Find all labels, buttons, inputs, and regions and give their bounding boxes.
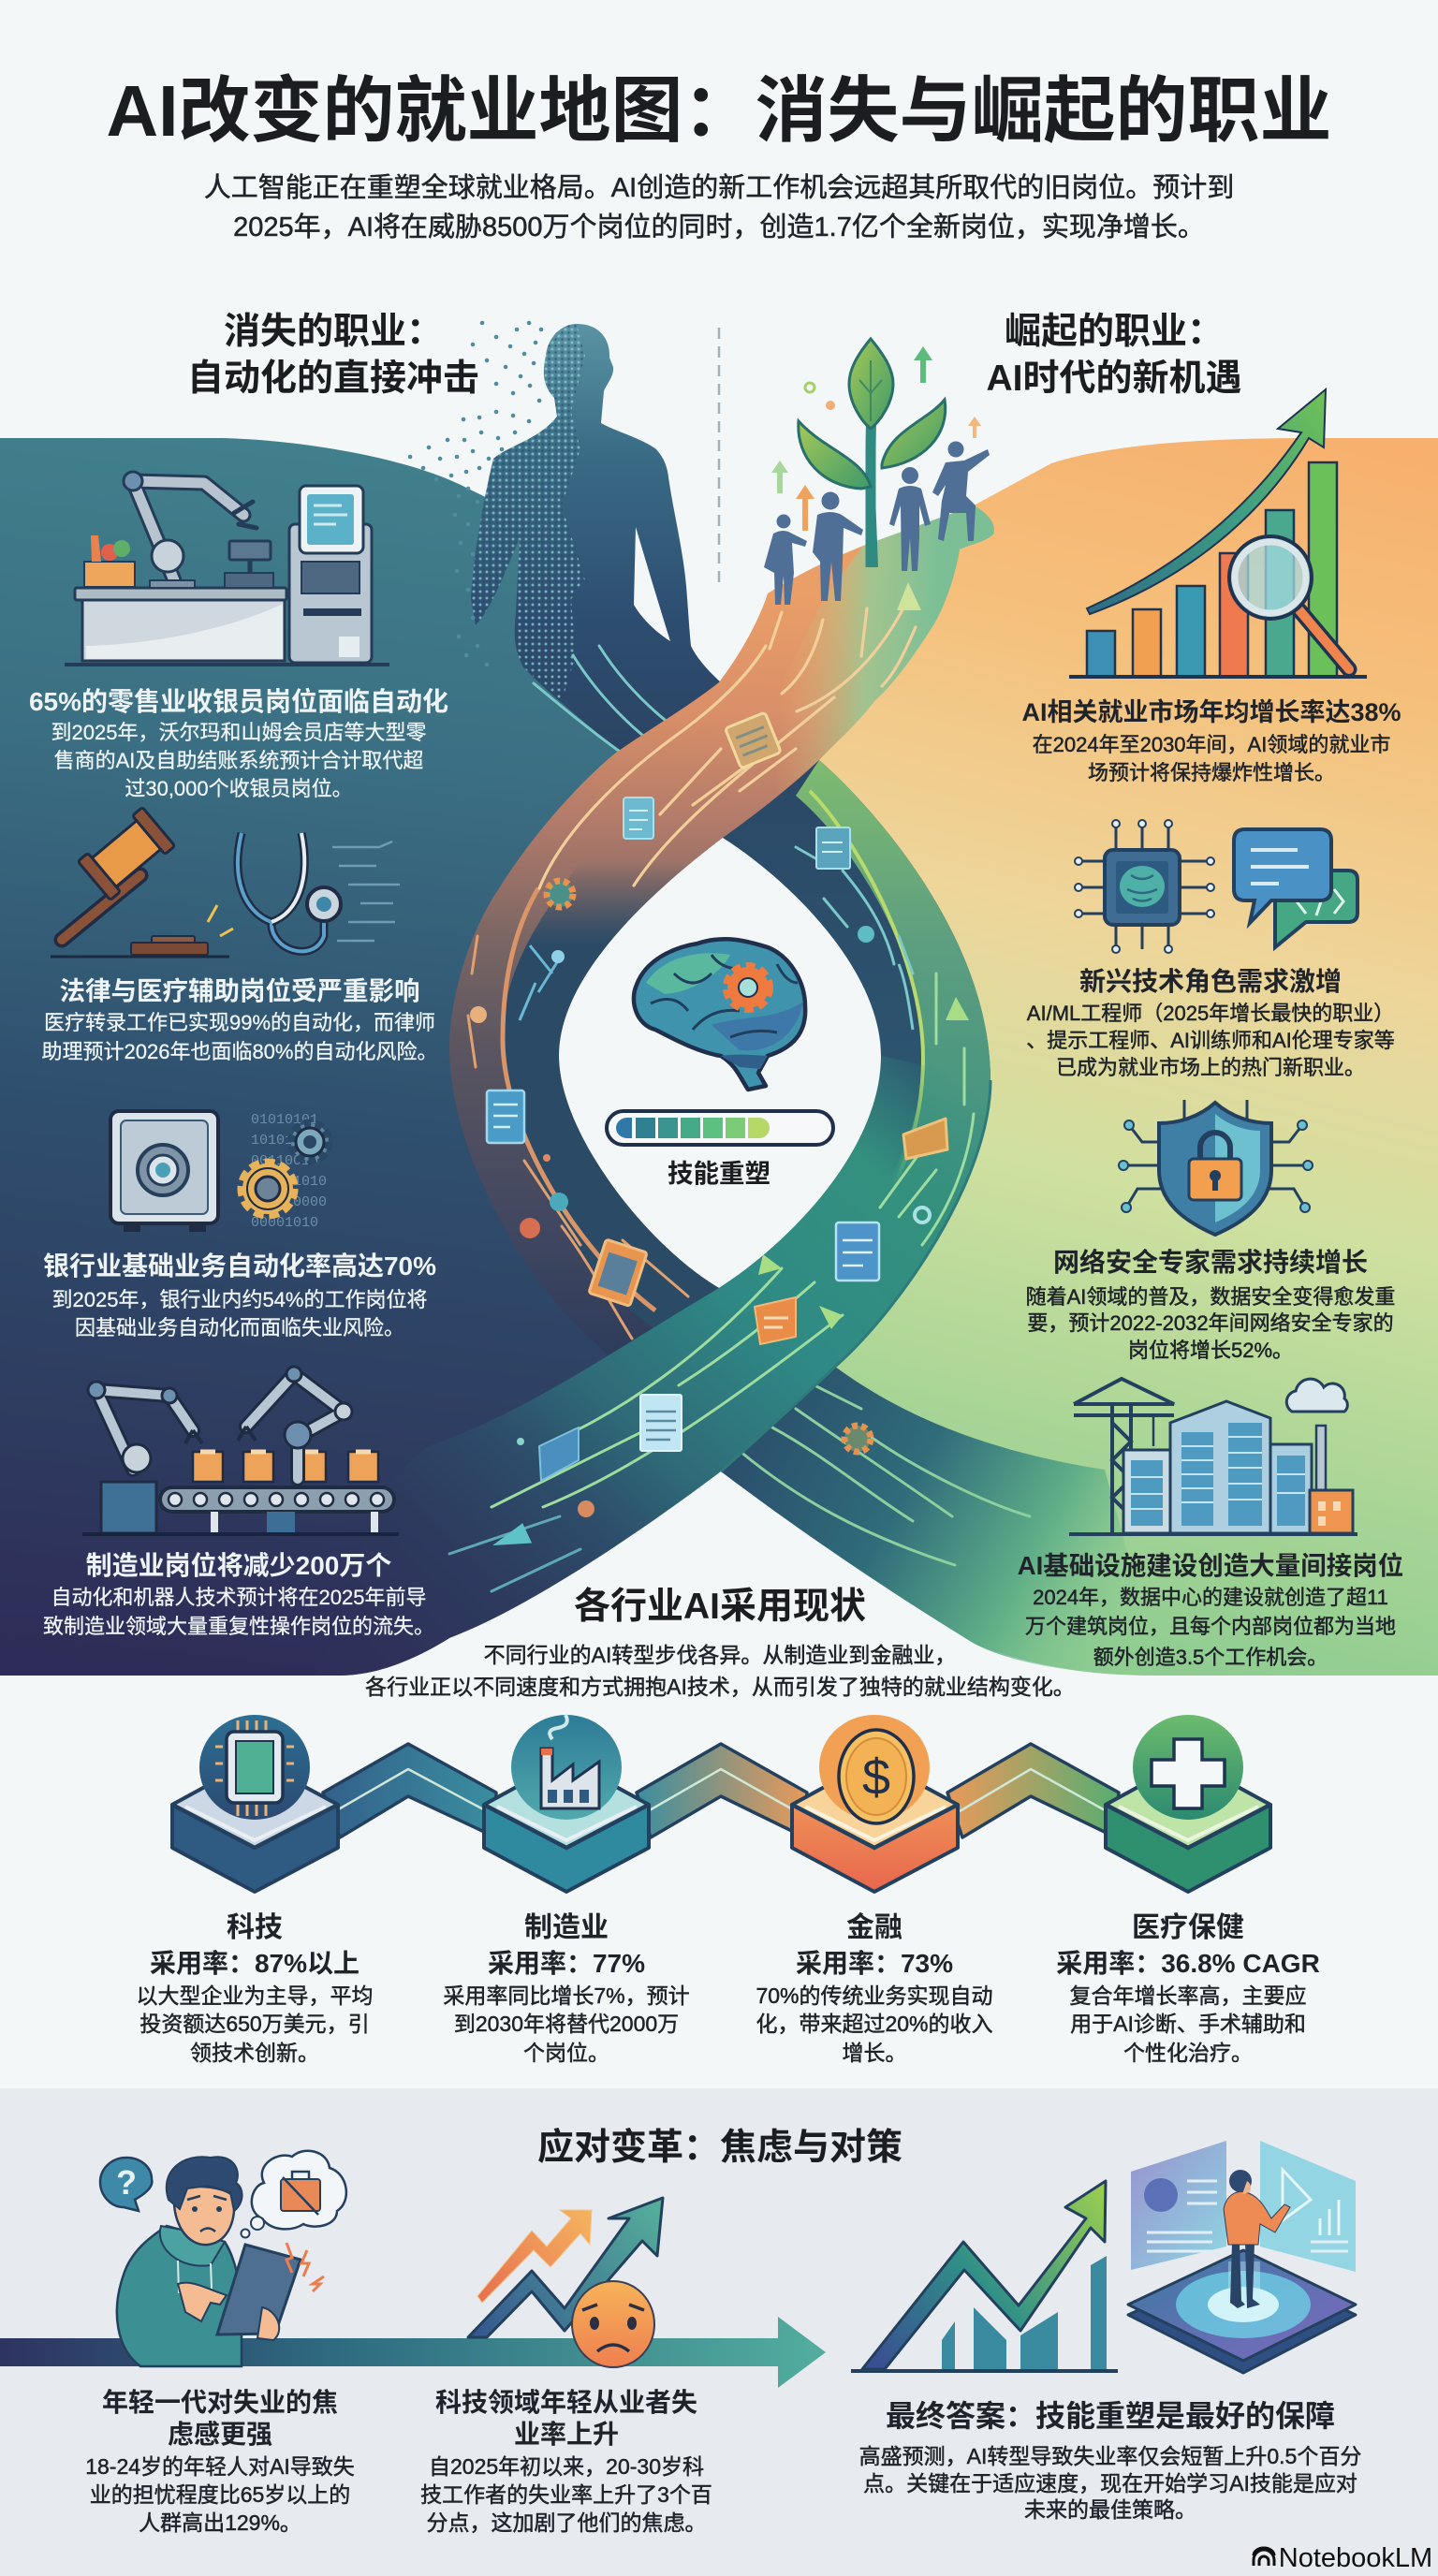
ribbon: lower crossing sweeping left xyxy=(318,973,990,1676)
text: finance stats: 增长。 xyxy=(843,2041,906,2065)
text: youth unemployment in tech: 自2025年初以来，20-30岁科 xyxy=(429,2454,704,2479)
label: skill rebuilding: 技能重塑 xyxy=(668,1159,770,1188)
text: technology stats: 以大型企业为主导，平均 xyxy=(137,1983,373,2008)
text: healthcare stats: 个性化治疗。 xyxy=(1123,2041,1253,2065)
text: emerging tech roles: 已成为就业市场上的热门新职业。 xyxy=(1056,1056,1365,1079)
text: technology stats: 投资额达650万美元，引 xyxy=(139,2012,370,2036)
progress bar: skill rebuilding xyxy=(607,1111,833,1145)
text: manufacturing stats: 制造业 xyxy=(524,1912,609,1943)
text: healthcare stats xyxy=(1056,1912,1320,2065)
heading: disappearing jobs: 自动化的直接冲击 xyxy=(187,359,479,399)
icon: brain with gear xyxy=(634,939,805,1090)
text: final answer: 未来的最佳策略。 xyxy=(1024,2497,1196,2522)
panel: disappearing jobs background xyxy=(0,438,655,1676)
node: technology xyxy=(172,1715,338,1892)
node: healthcare xyxy=(1106,1715,1270,1892)
text: industry intro xyxy=(365,1643,1075,1699)
text: industry intro: 各行业正以不同速度和方式拥抱AI技术，从而引发了独特的就业结构变化。 xyxy=(365,1675,1075,1699)
ribbon: silhouette path turning green xyxy=(534,646,990,1471)
text: emerging tech roles: 新兴技术角色需求激增 xyxy=(1079,967,1342,996)
floating document icons on the ribbons xyxy=(487,712,947,1481)
heading: industry adoption: 各行业AI采用现状 xyxy=(574,1587,866,1627)
text: youth anxiety: 年轻一代对失业的焦 xyxy=(102,2388,338,2417)
text: cybersecurity: 要，预计2022-2032年间网络安全专家的 xyxy=(1027,1311,1394,1335)
icon: gavel and stethoscope xyxy=(51,807,400,957)
text: technology stats: 领技术创新。 xyxy=(190,2041,319,2065)
connector: industry zigzag xyxy=(323,1744,1119,1837)
text: manufacturing stats: 采用率同比增长7%，预计 xyxy=(443,1983,690,2008)
text: industry intro: 不同行业的AI转型步伐各异。从制造业到金融业， xyxy=(484,1643,956,1667)
text: finance stats: 化，带来超过20%的收入 xyxy=(756,2012,993,2036)
text: manufacturing stats: 到2030年将替代2000万 xyxy=(454,2012,679,2036)
text: manufacturing: 致制造业领域大量重复性操作岗位的流失。 xyxy=(43,1615,434,1638)
text: youth unemployment in tech xyxy=(420,2388,712,2535)
text: AI infrastructure: 2024年，数据中心的建设就创造了超11 xyxy=(1033,1586,1388,1609)
text: AI infrastructure xyxy=(1018,1551,1403,1669)
text: youth unemployment in tech: 科技领域年轻从业者失 xyxy=(435,2388,697,2417)
icon: factory robots and conveyor xyxy=(82,1367,399,1534)
text: banking xyxy=(43,1251,436,1339)
text: cybersecurity: 岗位将增长52%。 xyxy=(1128,1339,1293,1362)
text: manufacturing stats xyxy=(443,1912,690,2065)
icon: rising bar chart with magnifier xyxy=(1069,389,1367,677)
illustration: rising unemployment chart with worried face xyxy=(468,2198,663,2337)
text: technology stats: 科技 xyxy=(227,1912,283,1943)
text: finance stats: 金融 xyxy=(846,1912,902,1943)
icon: security shield xyxy=(1119,1100,1313,1235)
text: youth unemployment in tech: 技工作者的失业率上升了3个百 xyxy=(420,2482,712,2507)
text: final answer: 最终答案：技能重塑是最好的保障 xyxy=(886,2399,1335,2433)
icon: data centre construction xyxy=(1069,1379,1357,1534)
text: youth anxiety: 18-24岁的年轻人对AI导致失 xyxy=(85,2454,355,2479)
text: legal and medical: 法律与医疗辅助岗位受严重影响 xyxy=(60,976,419,1005)
intro text: 人工智能正在重塑全球就业格局。AI创造的新工作机会远超其所取代的旧岗位。预计到 xyxy=(204,172,1234,203)
text: youth unemployment in tech: 分点，这加剧了他们的焦虑。 xyxy=(427,2510,706,2535)
illustration: worried young person: ? xyxy=(116,2163,137,2202)
text: final answer xyxy=(859,2399,1361,2522)
text: legal and medical: 医疗转录工作已实现99%的自动化，而律师 xyxy=(44,1011,435,1034)
text: banking: 到2025年，银行业内约54%的工作岗位将 xyxy=(52,1288,427,1311)
text: AI job market: AI相关就业市场年均增长率达38% xyxy=(1021,698,1401,726)
text: AI job market: 场预计将保持爆炸性增长。 xyxy=(1088,761,1335,784)
text: final answer: 点。关键在于适应速度，现在开始学习AI技能是应对 xyxy=(863,2471,1357,2496)
text: cybersecurity: 网络安全专家需求持续增长 xyxy=(1053,1248,1368,1277)
text: manufacturing stats: 采用率：77% xyxy=(488,1949,645,1978)
icon: safe and gears: 01010101 xyxy=(251,1112,318,1128)
heading: coping with change: 应对变革：焦虑与对策 xyxy=(537,2128,902,2168)
icon: safe and gears: 00001010 xyxy=(251,1215,318,1231)
text: healthcare stats: 复合年增长率高，主要应 xyxy=(1069,1983,1307,2008)
text: technology stats: 采用率：87%以上 xyxy=(150,1949,360,1978)
node: finance xyxy=(792,1715,958,1892)
ribbon: lower right tail xyxy=(637,1367,1161,1676)
ribbon lanes: lower right tail xyxy=(740,1385,1030,1565)
icon: safe and gears: 00110010 xyxy=(251,1153,318,1169)
text: youth anxiety: 业的担忧程度比65岁以上的 xyxy=(90,2482,350,2507)
text: cybersecurity: 随着AI领域的普及，数据安全变得愈发重 xyxy=(1026,1285,1395,1309)
text: legal and medical: 助理预计2026年也面临80%的自动化风险。 xyxy=(42,1040,437,1063)
icon: worried face xyxy=(572,2281,654,2367)
icon: AI chip and chat bubbles xyxy=(1075,820,1357,953)
text: legal and medical xyxy=(42,976,437,1063)
text: AI infrastructure: 额外创造3.5个工作机会。 xyxy=(1093,1646,1328,1669)
text: manufacturing xyxy=(43,1550,434,1638)
illustration: person on digital platform xyxy=(1128,2141,1356,2373)
icon: safe and gears: 10101001 xyxy=(251,1133,318,1149)
icon: safe and gears: 101010 xyxy=(276,1174,327,1190)
text: emerging tech roles xyxy=(1026,967,1395,1079)
text: finance stats: 采用率：73% xyxy=(796,1949,953,1978)
text: manufacturing: 制造业岗位将减少200万个 xyxy=(86,1550,391,1580)
heading: disappearing jobs: 消失的职业： xyxy=(224,312,443,352)
illustration: worried young person xyxy=(100,2151,346,2366)
heading: rising jobs: 崛起的职业： xyxy=(1005,312,1224,352)
illustration: growth arrow with bars xyxy=(851,2181,1118,2371)
heading: rising jobs: AI时代的新机遇 xyxy=(986,359,1242,399)
text: retail cashiers xyxy=(29,686,448,800)
text: finance stats: 70%的传统业务实现自动 xyxy=(756,1983,993,2008)
text: cybersecurity xyxy=(1026,1248,1395,1362)
text: AI job market: 在2024年至2030年间，AI领域的就业市 xyxy=(1033,733,1390,756)
intro text xyxy=(204,172,1234,242)
text: youth anxiety xyxy=(85,2388,355,2535)
watermark: NotebookLM: NotebookLM xyxy=(1279,2543,1432,2573)
arrow: anxiety to solution xyxy=(0,2317,826,2388)
text: final answer: 高盛预测，AI转型导致失业率仅会短暂上升0.5个百分 xyxy=(859,2444,1361,2468)
text: manufacturing: 自动化和机器人技术预计将在2025年前导 xyxy=(51,1586,426,1609)
text: youth anxiety: 虑感更强 xyxy=(168,2420,272,2449)
node: manufacturing xyxy=(484,1715,649,1892)
figure: dissolving silhouette xyxy=(410,323,796,796)
text: youth anxiety: 人群高出129%。 xyxy=(139,2510,301,2535)
heading: rising jobs xyxy=(986,312,1242,399)
text: banking: 银行业基础业务自动化率高达70% xyxy=(43,1251,436,1281)
text: emerging tech roles: AI/ML工程师（2025年增长最快的职业） xyxy=(1027,1002,1394,1025)
text: AI infrastructure: AI基础设施建设创造大量间接岗位 xyxy=(1018,1551,1403,1580)
icon: safe and gears xyxy=(110,1111,329,1232)
heading: disappearing jobs xyxy=(187,312,479,399)
ribbon: rising career path xyxy=(449,505,994,1471)
text: healthcare stats: 用于AI诊断、手术辅助和 xyxy=(1070,2012,1306,2036)
text: AI infrastructure: 万个建筑岗位，且每个内部岗位都为当地 xyxy=(1025,1615,1396,1638)
text: banking: 因基础业务自动化而面临失业风险。 xyxy=(75,1316,404,1339)
text: technology stats xyxy=(137,1912,373,2065)
node: finance: $ xyxy=(862,1749,890,1806)
text: youth unemployment in tech: 业率上升 xyxy=(514,2420,619,2449)
title: AI改变的就业地图：消失与崛起的职业 xyxy=(107,71,1331,152)
panel: rising jobs background xyxy=(805,438,1438,1676)
text: retail cashiers: 到2025年，沃尔玛和山姆会员店等大型零 xyxy=(51,721,426,744)
text: retail cashiers: 售商的AI及自助结账系统预计合计取代超 xyxy=(54,749,423,772)
text: healthcare stats: 采用率：36.8% CAGR xyxy=(1056,1949,1320,1978)
intro text: 2025年，AI将在威胁8500万个岗位的同时，创造1.7亿个全新岗位，实现净增长。 xyxy=(233,212,1205,242)
text: manufacturing stats: 个岗位。 xyxy=(523,2041,609,2065)
text: healthcare stats: 医疗保健 xyxy=(1132,1912,1244,1943)
text: retail cashiers: 过30,000个收银员岗位。 xyxy=(125,777,353,800)
text: retail cashiers: 65%的零售业收银员岗位面临自动化 xyxy=(29,686,448,716)
text: finance stats xyxy=(756,1912,993,2065)
illustration: plant and people on the path xyxy=(764,339,990,605)
icon: safe and gears: 010000 xyxy=(276,1194,327,1210)
text: AI job market xyxy=(1021,698,1401,784)
icon: retail automation xyxy=(65,472,389,665)
text: emerging tech roles: 、提示工程师、AI训练师和AI伦理专家等 xyxy=(1026,1029,1395,1052)
